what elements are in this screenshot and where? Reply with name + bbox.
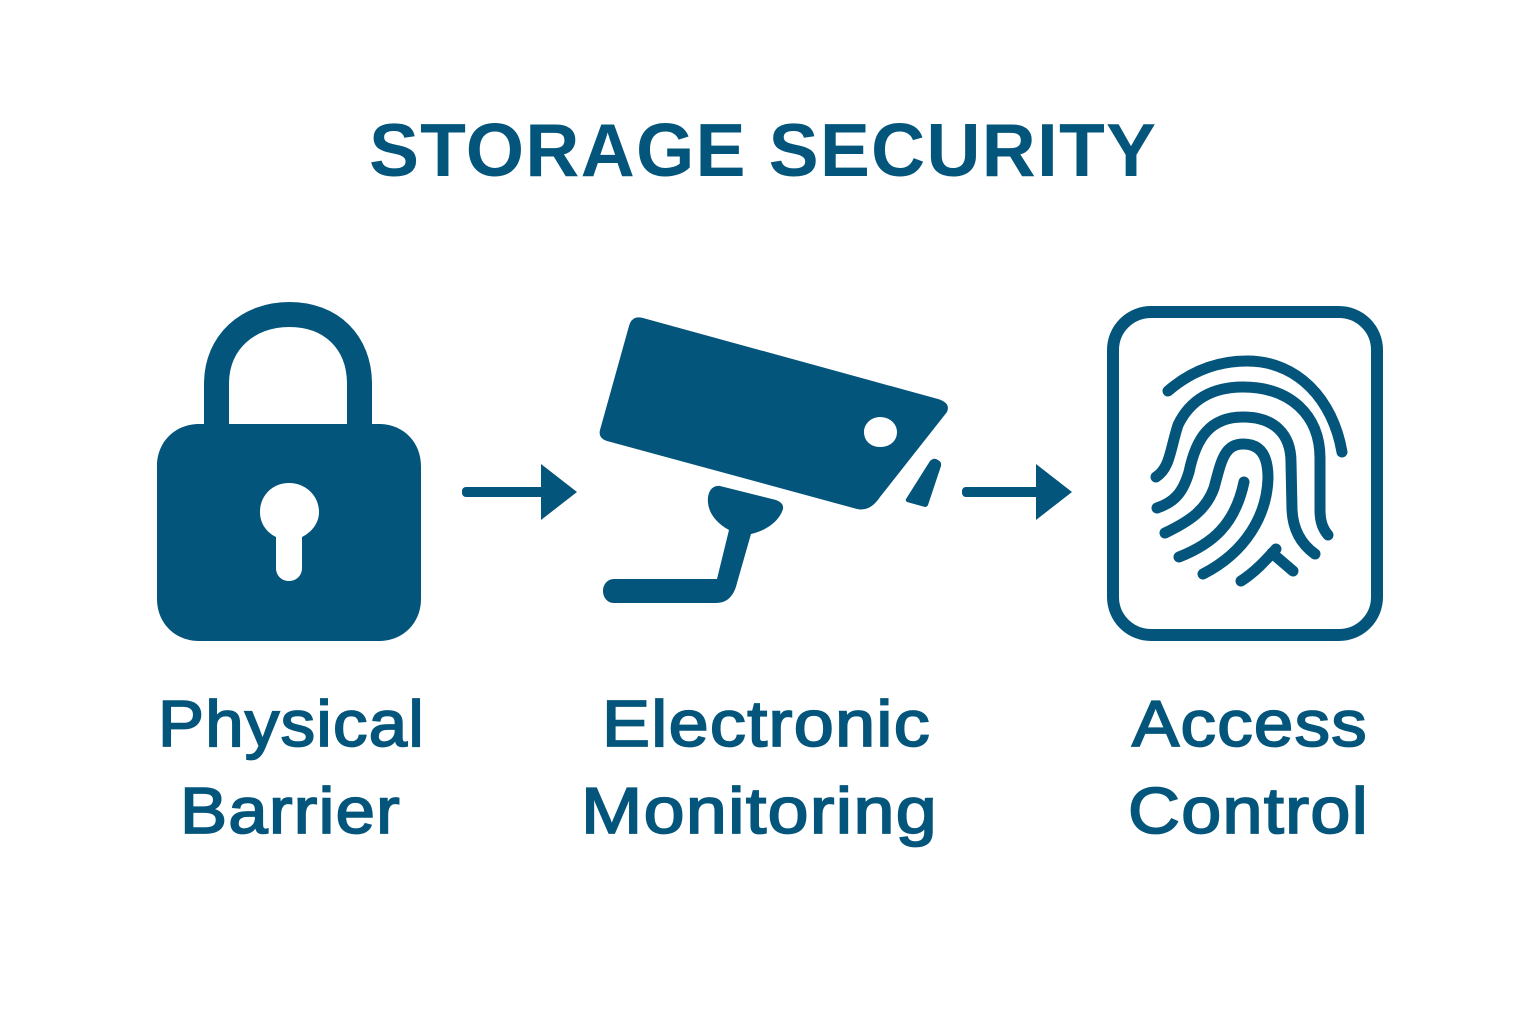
- label: access control: Control: [1128, 774, 1369, 847]
- rounded frame: [1113, 312, 1377, 635]
- arrow: camera to fingerprint: [962, 464, 1072, 520]
- camera mount: [603, 486, 783, 603]
- arrow: padlock to camera: [462, 464, 577, 520]
- fingerprint ridges: [1156, 361, 1342, 581]
- label: electronic monitoring: Monitoring: [581, 774, 938, 847]
- label: physical barrier: Barrier: [180, 774, 401, 847]
- icon: padlock: [157, 314, 421, 641]
- icon: fingerprint in frame: [1113, 312, 1377, 635]
- label: electronic monitoring: [581, 687, 938, 847]
- icon: security camera: [600, 317, 948, 603]
- label: physical barrier: [158, 687, 425, 847]
- label: access control: [1128, 687, 1369, 847]
- title: STORAGE SECURITY: [369, 108, 1156, 192]
- label: physical barrier: Physical: [158, 687, 425, 760]
- camera body: [600, 317, 948, 510]
- label: electronic monitoring: Electronic: [602, 687, 931, 760]
- label: access control: Access: [1132, 687, 1368, 760]
- camera lens hood: [906, 459, 941, 507]
